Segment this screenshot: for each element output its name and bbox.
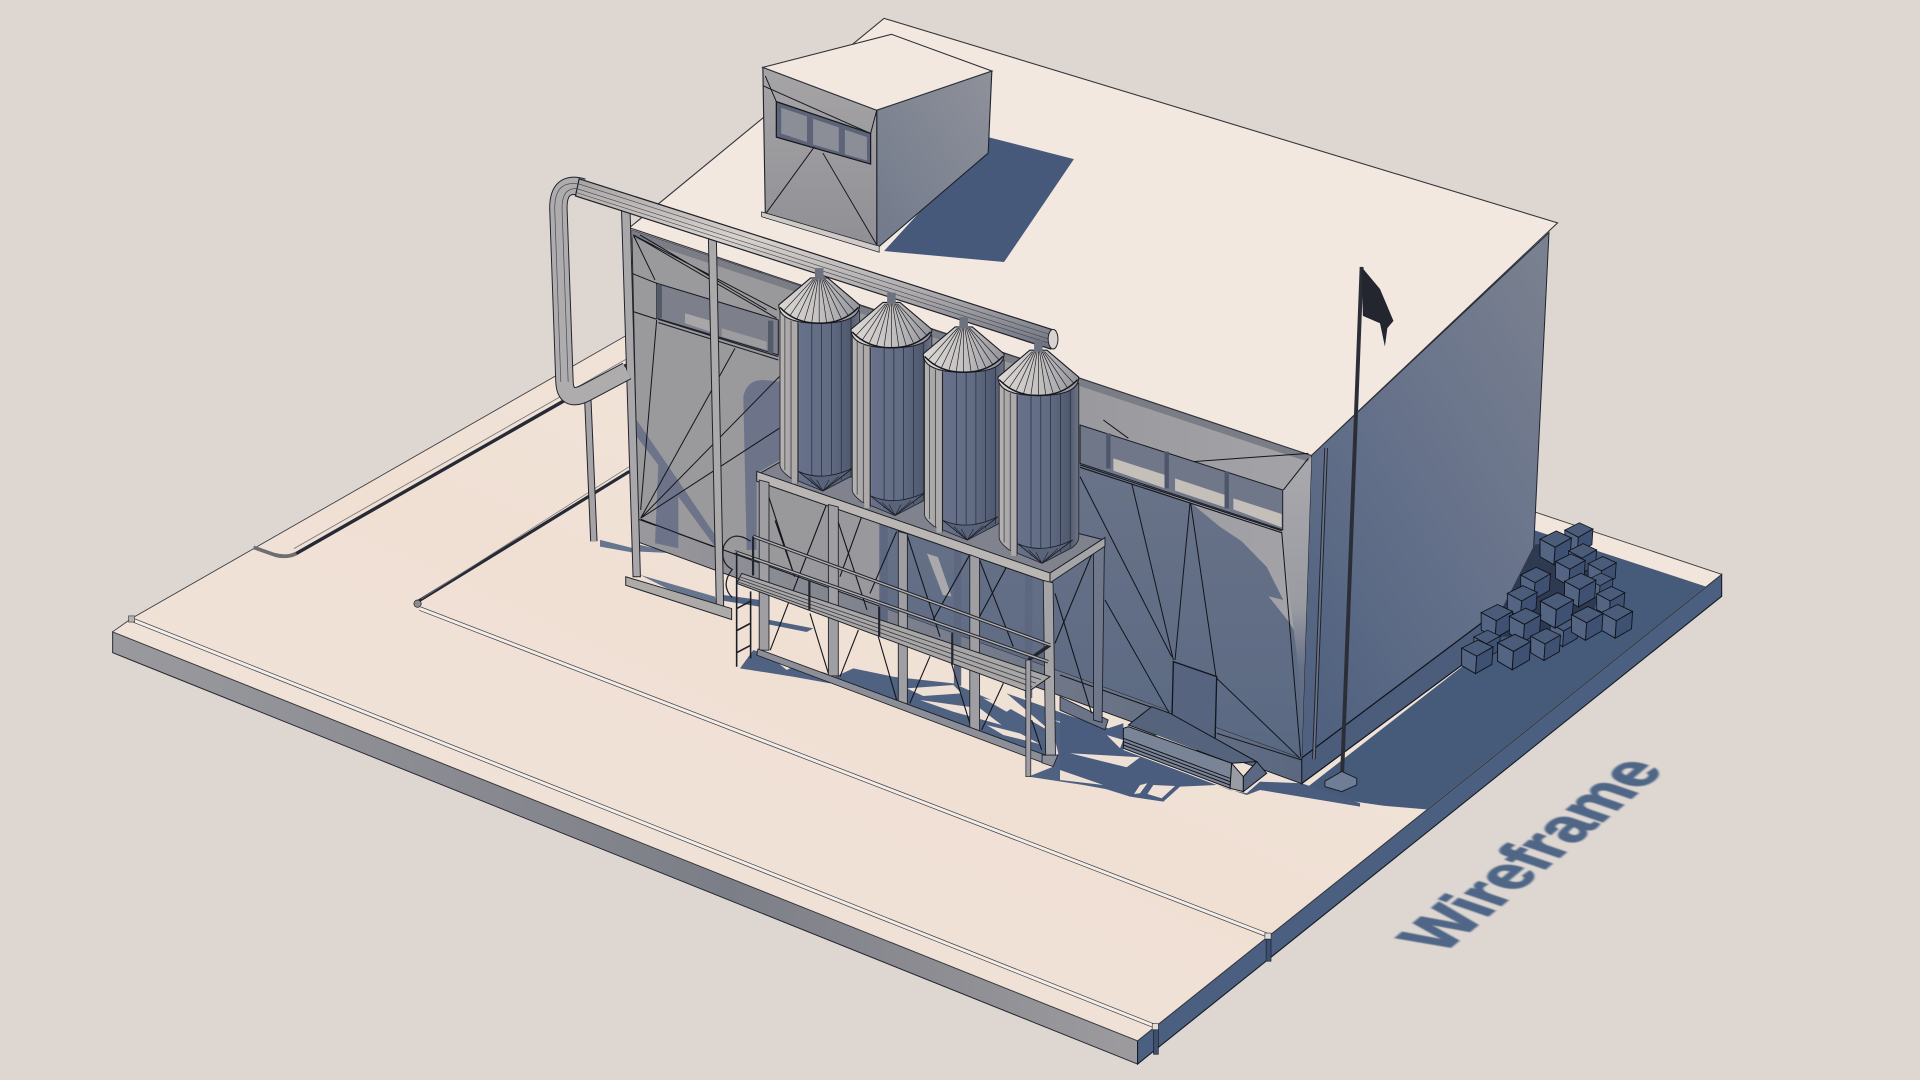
bracing	[765, 486, 1092, 750]
base slab	[113, 294, 1722, 1064]
rail posts	[753, 536, 952, 665]
left wall wireframe lines	[632, 235, 779, 547]
flag cloth	[1362, 267, 1393, 347]
crate	[1507, 586, 1537, 618]
pipe vertical drop and elbows	[558, 186, 627, 396]
cast shadow to the right of the building	[1299, 530, 1706, 809]
light corner strip	[1282, 457, 1311, 758]
right side foot	[1060, 697, 1108, 730]
duct face	[1123, 727, 1232, 788]
left wall shadows and window	[632, 235, 780, 550]
support frame posts	[588, 208, 732, 620]
front legs	[759, 480, 769, 650]
crate	[1588, 573, 1613, 600]
ladder	[737, 552, 751, 667]
rails	[735, 536, 1050, 662]
crate	[1540, 531, 1571, 565]
post foot	[626, 577, 732, 620]
eave shade	[632, 230, 1311, 462]
silo shadow	[743, 380, 780, 550]
slab front curb	[129, 616, 1158, 1054]
diagonal frame shadow	[637, 420, 715, 548]
penthouse windows	[776, 102, 871, 164]
short back post	[588, 398, 594, 541]
left window recess	[657, 283, 778, 355]
silo 1	[779, 268, 860, 491]
pole base	[1325, 771, 1357, 792]
front foot	[1042, 755, 1058, 767]
roof	[629, 18, 1558, 456]
shadow beside left frame	[600, 540, 717, 605]
right side beam	[1050, 538, 1105, 583]
shadow stripes under platform	[723, 595, 1120, 792]
ladder cage	[723, 536, 751, 598]
ground pipe lines	[253, 359, 629, 607]
walkway floor	[737, 573, 1050, 692]
silo 2	[851, 293, 932, 516]
crate	[1521, 567, 1550, 599]
crate	[1462, 640, 1493, 674]
right wall	[1302, 233, 1549, 758]
penthouse base lip	[762, 212, 879, 252]
front beam	[757, 471, 1050, 583]
crate	[1509, 608, 1541, 642]
door	[1172, 662, 1217, 743]
long ground curb	[420, 609, 1271, 961]
frame top back	[757, 460, 1104, 577]
crate	[1597, 586, 1625, 617]
right wall section windows and lines	[1060, 420, 1308, 760]
front base plinth	[638, 519, 1302, 784]
crate	[1565, 523, 1593, 553]
right back post	[1093, 540, 1104, 722]
ground beam	[757, 649, 1053, 767]
crate	[1540, 593, 1573, 628]
crate	[1498, 634, 1531, 670]
platform front structure	[757, 471, 1105, 767]
wireframe label: Wireframe	[1381, 749, 1680, 959]
slab right side face	[1138, 574, 1722, 1064]
silo 3	[923, 317, 1004, 540]
silo 4	[998, 340, 1079, 563]
crate	[1564, 573, 1596, 607]
duct box by the door	[1123, 707, 1267, 792]
flag	[1325, 267, 1393, 792]
walkway with railing	[723, 536, 1050, 777]
penthouse right wall	[877, 71, 992, 249]
building	[629, 18, 1558, 784]
penthouse top	[763, 34, 992, 110]
crate	[1481, 604, 1513, 638]
crate	[1555, 554, 1585, 586]
duct interior	[1128, 707, 1257, 763]
slab top surface	[113, 294, 1722, 1041]
crate	[1531, 629, 1560, 660]
crate	[1474, 630, 1500, 659]
shadow on right part of front wall	[879, 392, 1305, 758]
upper ground tube	[274, 365, 627, 556]
penthouse wireframe lines	[763, 76, 877, 245]
duct end block	[1230, 763, 1243, 792]
crate	[1588, 556, 1616, 587]
rooftop penthouse	[762, 34, 1074, 262]
pipe end cap	[1048, 329, 1058, 349]
dark mass behind crates	[1488, 536, 1604, 637]
penthouse front wall	[763, 67, 877, 249]
back legs and wall shadows	[833, 504, 1098, 722]
crate	[1550, 616, 1578, 647]
duct light strip	[1155, 735, 1197, 753]
pipe horizontal run	[576, 179, 1056, 349]
right wall wireframe lines	[1060, 420, 1308, 760]
slab left side face	[113, 632, 1138, 1064]
front wall	[632, 230, 1311, 758]
shadow in front of door and duct	[1060, 713, 1360, 807]
pile of crates	[1462, 523, 1633, 674]
right base plinth	[1302, 585, 1532, 784]
flag pole	[1342, 267, 1362, 776]
crate	[1569, 544, 1597, 574]
penthouse shadow	[884, 137, 1074, 262]
platform back structure	[757, 460, 1108, 750]
lower ground tube	[416, 471, 629, 602]
right windows	[1080, 425, 1283, 530]
crate	[1572, 607, 1603, 640]
crate	[1601, 604, 1633, 638]
duct stepped end	[1243, 762, 1267, 792]
dappled light on wall	[927, 553, 951, 596]
drainpipe on corner	[1314, 448, 1326, 759]
overhead pipe	[555, 179, 1058, 396]
front walkway post	[1026, 660, 1031, 777]
left posts	[621, 208, 640, 577]
